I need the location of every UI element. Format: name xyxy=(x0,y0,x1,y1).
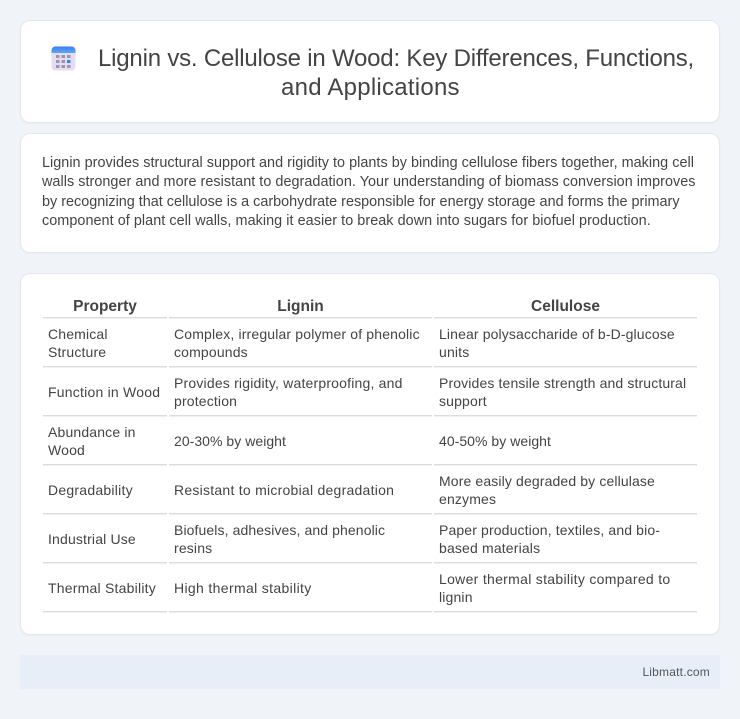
row: thermal stability xyxy=(48,571,670,605)
row: thermal stability: Thermal Stability xyxy=(48,580,156,596)
row: function in wood: Provides tensile strength and structural xyxy=(439,375,686,391)
table header: Lignin xyxy=(277,298,324,315)
row: chemical structure: Linear polysaccharide of b-D-glucose xyxy=(439,326,675,342)
row: function in wood xyxy=(48,375,686,409)
row: abundance in wood xyxy=(48,424,551,458)
footer bar xyxy=(20,655,720,689)
row: thermal stability: High thermal stability xyxy=(174,580,312,596)
row: function in wood: protection xyxy=(174,393,237,409)
intro paragraph: component of plant cell walls, making it easier to break down into sugars for biofuel production. xyxy=(42,213,651,229)
table header xyxy=(73,298,600,315)
footer credit: Libmatt.com xyxy=(642,665,710,679)
row: thermal stability: lignin xyxy=(439,589,473,605)
row: industrial use: Industrial Use xyxy=(48,531,136,547)
row: chemical structure xyxy=(48,326,675,360)
row: chemical structure: units xyxy=(439,344,469,360)
title: and Applications xyxy=(281,74,460,101)
row: abundance in wood: Abundance in xyxy=(48,424,136,440)
intro paragraph: walls stronger and more resistant to degradation. Your understanding of biomass conversion improves xyxy=(42,174,696,190)
intro paragraph xyxy=(42,155,696,229)
row: chemical structure: Structure xyxy=(48,344,106,360)
row: industrial use: Biofuels, adhesives, and phenolic xyxy=(174,522,385,538)
row: abundance in wood: 40-50% by weight xyxy=(439,433,551,449)
row: chemical structure: Chemical xyxy=(48,326,108,342)
table header: Property xyxy=(73,298,137,315)
header panel xyxy=(20,20,720,123)
row: industrial use: based materials xyxy=(439,540,540,556)
table header: Cellulose xyxy=(531,298,600,315)
icon: calendar xyxy=(52,46,76,70)
row: abundance in wood: 20-30% by weight xyxy=(174,433,286,449)
intro paragraph: by recognizing that cellulose is a carbohydrate responsible for energy storage and forms the primary xyxy=(42,194,680,210)
row: industrial use xyxy=(48,522,660,556)
row: industrial use: resins xyxy=(174,540,212,556)
comparison table panel xyxy=(20,273,720,635)
row: function in wood: Function in Wood xyxy=(48,384,160,400)
row: chemical structure: Complex, irregular polymer of phenolic xyxy=(174,326,420,342)
row: degradability: Degradability xyxy=(48,482,133,498)
row: degradability: Resistant to microbial degradation xyxy=(174,482,394,498)
row: degradability: enzymes xyxy=(439,491,496,507)
row: chemical structure: compounds xyxy=(174,344,248,360)
row: industrial use: Paper production, textiles, and bio- xyxy=(439,522,660,538)
title: Lignin vs. Cellulose in Wood: Key Differences, Functions, xyxy=(98,45,694,72)
intro paragraph: Lignin provides structural support and rigidity to plants by binding cellulose fibers together, making cell xyxy=(42,155,694,171)
row: function in wood: support xyxy=(439,393,487,409)
row: degradability: More easily degraded by cellulase xyxy=(439,473,655,489)
title xyxy=(98,45,694,101)
row: thermal stability: Lower thermal stability compared to xyxy=(439,571,670,587)
row: degradability xyxy=(48,473,655,507)
row: function in wood: Provides rigidity, waterproofing, and xyxy=(174,375,403,391)
intro text panel xyxy=(20,133,720,253)
row: abundance in wood: Wood xyxy=(48,442,85,458)
